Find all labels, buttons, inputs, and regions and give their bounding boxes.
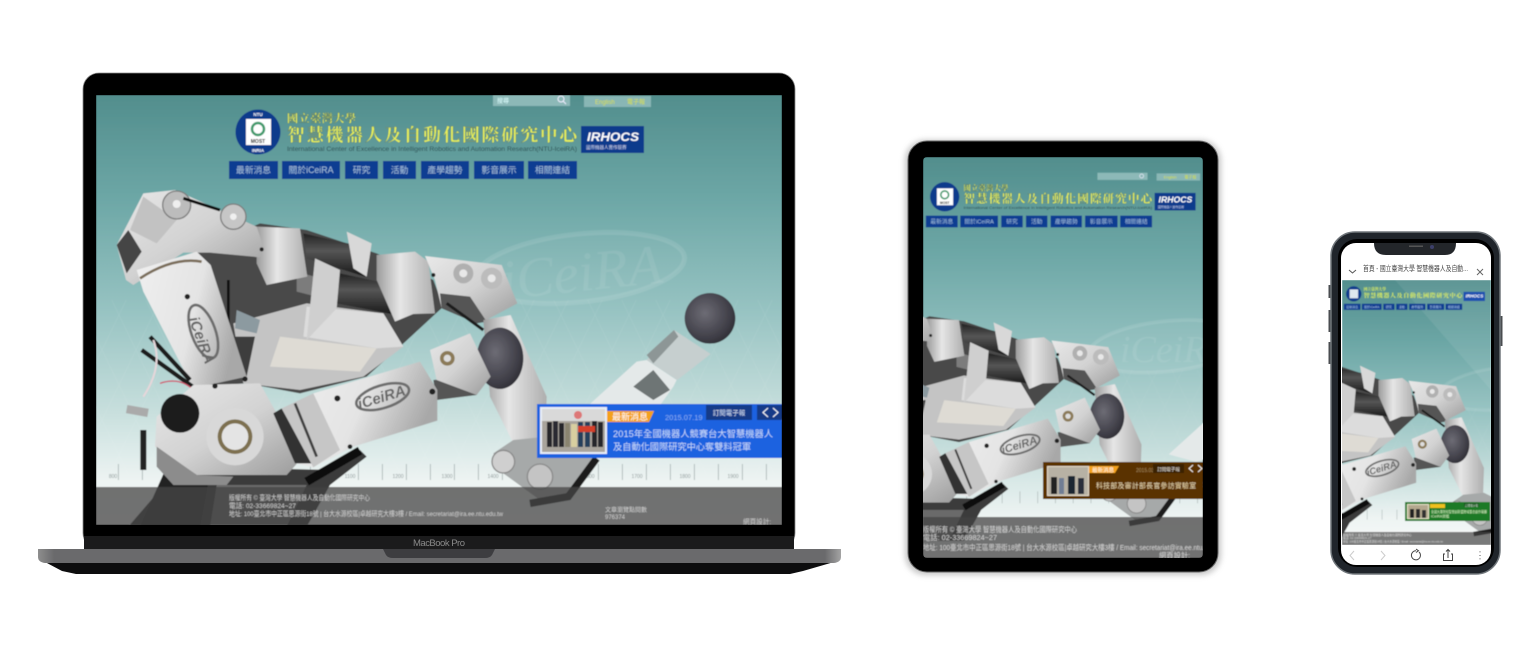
ruler labels: 1700 xyxy=(631,474,643,480)
search box xyxy=(493,95,570,106)
center logo: INRIA xyxy=(252,148,265,153)
IRHOCS badge xyxy=(1155,193,1196,210)
subscribe button: 訂閱電子報 xyxy=(1157,466,1180,473)
subscribe button xyxy=(1153,464,1184,473)
IRHOCS badge xyxy=(1464,292,1485,301)
icon: share xyxy=(1444,550,1452,560)
icon: back xyxy=(1350,551,1354,560)
ruler labels: 1500 xyxy=(535,474,547,480)
device: iPad xyxy=(902,137,1224,578)
browser toolbar icons xyxy=(1350,549,1480,560)
IRHOCS badge: IRHOCS xyxy=(1159,196,1193,205)
headline: 2015年全國機器人競賽台大智慧機器人 xyxy=(613,428,773,439)
date: 2015.03. xyxy=(1136,468,1155,474)
navigation: 關於iCeiRA xyxy=(965,217,994,225)
pager arrows xyxy=(1189,465,1202,472)
icon: reload xyxy=(1411,549,1420,560)
navigation: 產學趨勢 xyxy=(1411,304,1423,309)
navigation: 影音展示 xyxy=(481,164,517,175)
navigation: 相關連結 xyxy=(535,164,570,175)
navigation: 研究 xyxy=(353,164,370,175)
site header xyxy=(926,173,1200,227)
laptop screen xyxy=(96,95,782,525)
tablet screen xyxy=(923,157,1203,558)
language links: 電子報 xyxy=(627,99,645,106)
navigation: 影音展示 xyxy=(1430,304,1442,309)
subscribe button xyxy=(706,405,752,420)
language links xyxy=(1157,173,1200,181)
tag: 最新消息 xyxy=(612,411,648,422)
center logo xyxy=(930,182,959,211)
IRHOCS badge: IRHOCS xyxy=(587,130,639,144)
navigation: 最新消息 xyxy=(1346,304,1358,309)
title: 國立臺灣大學 xyxy=(1364,286,1386,291)
footer: 版權所有 © 臺灣大學 智慧機器人及自動化國際研究中心 xyxy=(923,525,1078,534)
tablet bezel xyxy=(908,141,1218,572)
footer: 文章瀏覽點閱數 xyxy=(605,506,647,514)
news photo xyxy=(540,407,607,454)
english subtitle: International Center of Excellence in Intelligent Robotics and Automation Research(NTU-IceiRA) xyxy=(964,205,1153,210)
center logo: NTU xyxy=(253,112,263,117)
title xyxy=(287,111,580,145)
title xyxy=(964,183,1154,206)
footer: 版權所有 © 臺灣大學 智慧機器人及自動化國際研究中心 xyxy=(229,493,370,502)
ruler labels: 1200 xyxy=(392,474,404,480)
news card: blue xyxy=(537,404,782,458)
center logo: MOST xyxy=(940,201,949,205)
icon: chevron down xyxy=(1349,270,1356,273)
tablet shadow xyxy=(905,140,1221,575)
navigation: 活動 xyxy=(1399,304,1405,309)
headline: 科技部及審計部長官參訪實驗室 xyxy=(1096,481,1196,490)
title: 智慧機器人及自動化國際研究中心 xyxy=(287,125,580,145)
robot arm photo: iCeiRA xyxy=(1366,459,1398,478)
ruler labels xyxy=(108,474,739,478)
headline xyxy=(1431,509,1487,518)
footer: 網頁設計: xyxy=(1159,551,1190,560)
site header xyxy=(229,95,651,179)
robot arm photo xyxy=(1182,340,1540,549)
footer: 電話: 02-33669824~27 xyxy=(923,533,997,542)
date: 2015.07.19 xyxy=(665,413,703,422)
center logo xyxy=(1346,286,1361,302)
search box: 搜尋 xyxy=(497,97,509,105)
laptop base xyxy=(38,549,841,574)
navigation: 相關連結 xyxy=(1125,217,1148,225)
news card: green xyxy=(1405,502,1490,521)
english subtitle: International Center of Excellence in Intelligent Robotics and Automation Research(NTU-IceiRA) xyxy=(287,147,577,153)
center logo xyxy=(236,110,280,154)
ruler labels: 1100 xyxy=(345,474,356,480)
tag xyxy=(1430,504,1445,508)
tag: 最新消息 xyxy=(1092,466,1115,474)
navigation: 影音展示 xyxy=(1090,217,1113,225)
navigation: 活動 xyxy=(391,164,408,175)
footer: 地址: 100臺北市中正區思源街18號 | 台大水源校區|卓越研究大樓3樓 / Email: secretariat@ira.ee.ntu.edu.tw xyxy=(923,543,1224,552)
news card: brown xyxy=(1043,462,1203,499)
ruler labels: 800 xyxy=(109,474,117,480)
navigation xyxy=(1344,304,1462,310)
ruler labels: 1400 xyxy=(487,474,499,480)
footer: 網頁設計: xyxy=(743,517,771,526)
navigation: 最新消息 xyxy=(930,217,953,225)
title xyxy=(1364,286,1463,299)
side buttons xyxy=(1328,285,1502,364)
search box xyxy=(1097,173,1148,180)
footer: 976374 xyxy=(605,515,626,521)
IRHOCS badge: IRHOCS xyxy=(1466,294,1484,299)
icon: close xyxy=(1477,269,1483,275)
robot arm photo: iCeiRA xyxy=(874,384,897,422)
headline: 全國大專院校智慧創新暨跨域整合創作競賽 xyxy=(1431,509,1487,514)
headline xyxy=(613,428,773,452)
browser chrome xyxy=(1341,243,1491,565)
laptop hinge chin xyxy=(84,536,794,549)
news photo xyxy=(1047,466,1089,496)
icon: more xyxy=(1479,552,1481,559)
footer xyxy=(923,517,1224,560)
navigation xyxy=(926,216,1152,227)
language links: English xyxy=(1164,175,1177,180)
navigation: 相關連結 xyxy=(1448,304,1460,309)
pager arrows xyxy=(757,405,782,420)
language links: 電子報 xyxy=(1185,175,1196,180)
footer: 地址: 100臺北市中正區思源街18號 | 台大水源校區|卓越研究大樓3樓 / Email: secretariat@ira.ee.ntu.edu.tw xyxy=(229,509,503,518)
ruler labels: 1300 xyxy=(441,474,453,480)
footer: 版權所有 © 臺灣大學 智慧機器人及自動化國際研究中心 xyxy=(1343,533,1412,537)
navigation: 最新消息 xyxy=(236,164,271,175)
device: MacBook Pro xyxy=(38,73,841,574)
footer xyxy=(96,487,782,526)
ruler labels: 1900 xyxy=(727,474,739,480)
navigation: 研究 xyxy=(1386,304,1392,309)
robot arm photo: iCeiRA xyxy=(185,314,218,366)
language links xyxy=(584,96,651,107)
phone webpage xyxy=(1182,280,1540,549)
headline: iCeiRA榮獲 xyxy=(1431,514,1450,518)
navigation: 產學趨勢 xyxy=(427,164,463,175)
notch xyxy=(1374,243,1456,255)
news photo xyxy=(1407,504,1429,519)
title: 國立臺灣大學 xyxy=(287,111,356,125)
tag xyxy=(1089,466,1119,474)
watermark: iCeiRA xyxy=(498,234,666,312)
navigation: 活動 xyxy=(1031,217,1043,225)
site header xyxy=(1344,286,1485,310)
phone body xyxy=(1331,232,1500,574)
robot arm photo xyxy=(923,316,1203,542)
icon: forward xyxy=(1381,551,1385,560)
title: 國立臺灣大學 xyxy=(964,183,1008,192)
robot arm photo xyxy=(117,190,735,527)
robot arm photo: iCeiRA xyxy=(1000,435,1039,457)
footer: 電話: 02-33669824~27 xyxy=(229,501,296,510)
IRHOCS badge: 國際機器人實作競賽 xyxy=(1158,204,1184,209)
headline: 及自動化國際研究中心奪雙料冠軍 xyxy=(613,441,751,452)
ruler labels: 1800 xyxy=(679,474,691,480)
ruler labels: 1600 xyxy=(583,474,595,480)
title: 智慧機器人及自動化國際研究中心 xyxy=(964,192,1154,206)
language links: English xyxy=(595,100,615,106)
IRHOCS badge: 國際機器人實作競賽 xyxy=(586,144,627,151)
robot arm photo: iCeiRA xyxy=(356,382,408,413)
navigation: 關於iCeiRA xyxy=(1364,304,1379,309)
navigation: 產學趨勢 xyxy=(1055,217,1078,225)
device: iPhone xyxy=(1182,232,1540,574)
navigation: 研究 xyxy=(1006,217,1018,225)
laptop lid xyxy=(83,73,795,549)
subscribe button: 訂閱電子報 xyxy=(713,408,746,417)
navigation xyxy=(229,161,577,179)
footer xyxy=(1342,532,1491,545)
IRHOCS badge xyxy=(581,126,644,153)
laptop model label: MacBook Pro xyxy=(413,538,465,549)
subscribe button: 訂閱電子報 xyxy=(1465,503,1478,507)
tag xyxy=(607,411,654,422)
footer: 電話: 02-33669824~27 xyxy=(1343,536,1372,540)
navigation: 關於iCeiRA xyxy=(289,164,334,175)
watermark: iCeiRA xyxy=(1120,329,1231,371)
footer: 地址: 100臺北市中正區思源街18號 | 台大水源校區 / Email: secretariat@ira.ee.ntu.edu.tw xyxy=(1343,540,1444,544)
phone screen xyxy=(1338,239,1494,567)
title: 智慧機器人及自動化國際研究中心 xyxy=(1364,291,1463,299)
center logo: MOST xyxy=(251,139,265,145)
browser tab title: 首頁 - 國立臺灣大學 智慧機器人及自動... xyxy=(1363,264,1468,273)
